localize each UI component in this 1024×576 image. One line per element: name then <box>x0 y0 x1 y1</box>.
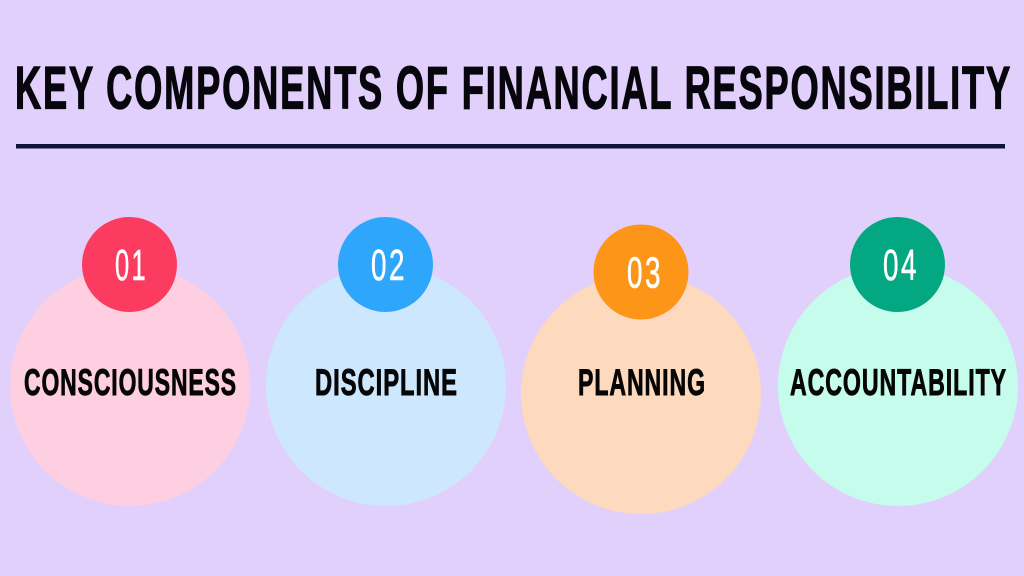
panel: discipline <box>266 217 506 506</box>
large circle: consciousness <box>10 266 250 506</box>
large circle: planning <box>521 274 761 514</box>
number badge 02: 02 <box>371 241 407 290</box>
number badge 04 <box>850 217 945 312</box>
panel: accountability <box>778 217 1018 506</box>
number badge 03: 03 <box>627 248 663 298</box>
panel: planning <box>521 224 761 514</box>
number badge 01: 01 <box>115 241 148 290</box>
panel: consciousness <box>10 217 250 506</box>
large circle: accountability <box>778 266 1018 506</box>
label: consciousness: CONSCIOUSNESS <box>24 362 237 403</box>
number badge 02 <box>338 217 433 312</box>
label: planning: PLANNING <box>578 362 706 403</box>
label: discipline: DISCIPLINE <box>315 362 458 403</box>
number badge 04: 04 <box>883 241 919 290</box>
large circle: discipline <box>266 266 506 506</box>
title underline <box>16 144 1005 148</box>
number badge 03 <box>594 224 688 320</box>
number badge 01 <box>82 217 177 312</box>
